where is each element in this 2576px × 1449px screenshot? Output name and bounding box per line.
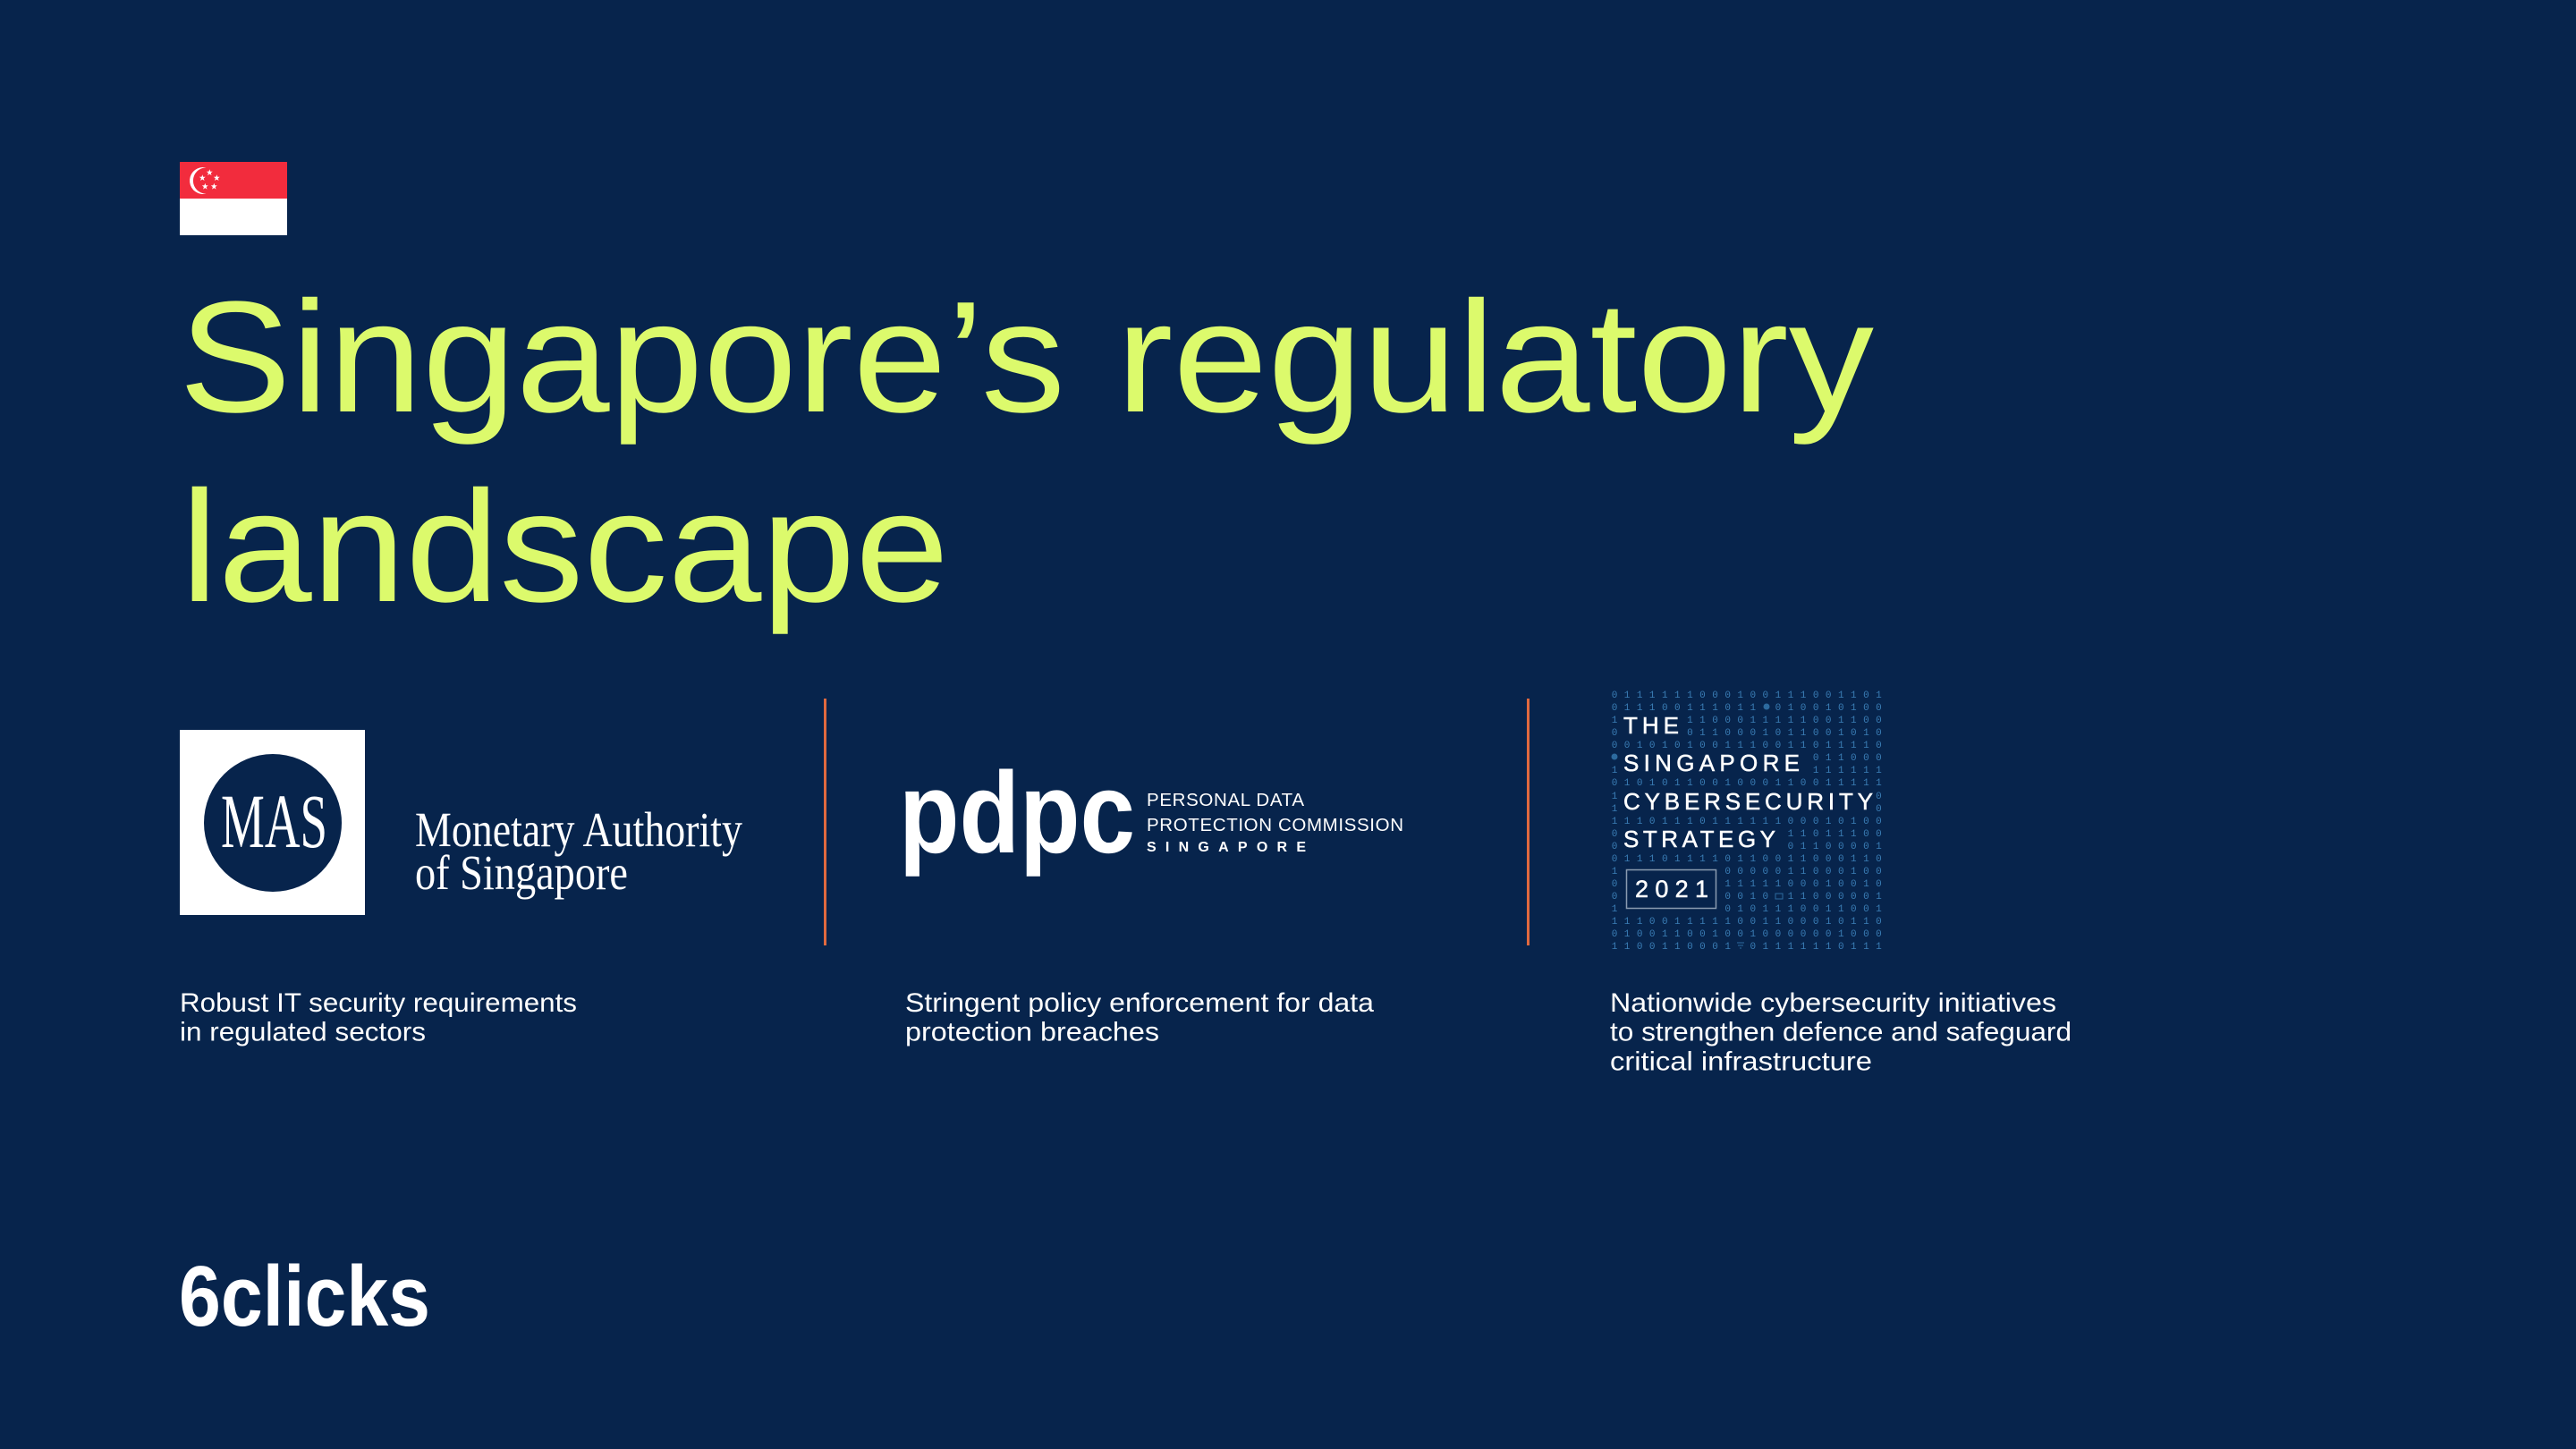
- binary digit background: 1110111011111100010100: [1612, 817, 1888, 827]
- text: PDPC description: protection breaches: [905, 1018, 1159, 1046]
- cover title: SINGAPORE: [1623, 750, 1800, 776]
- title: [179, 268, 1875, 635]
- binary digit background: 0 01100001: [1612, 842, 1888, 852]
- text: PDPC description: Stringent policy enforcement for data: [905, 988, 1374, 1018]
- panel: MAS logo: [180, 730, 742, 915]
- binary digit background: 0010101001110011011110: [1612, 741, 1888, 751]
- cover title: STRATEGY: [1623, 826, 1775, 852]
- text: MAS description: Robust IT security requirements: [180, 988, 577, 1018]
- panel: PDPC logo: PERSONAL DATA: [1147, 790, 1304, 810]
- binary digit background: 0111111000100111001101: [1612, 691, 1888, 701]
- year box: 2021: [1635, 876, 1708, 902]
- title: regulatory: [1116, 268, 1875, 445]
- binary digit background: 1100110001 01111110111: [1612, 942, 1888, 953]
- panel: PDPC logo: pdpc: [899, 749, 1135, 877]
- icon: Singapore flag: [180, 162, 287, 235]
- binary digit background: 0 11011100: [1612, 829, 1888, 840]
- binary digit background: 0101011001000110011111: [1612, 778, 1888, 789]
- title: landscape: [181, 458, 949, 635]
- text: cybersecurity strategy description: to strengthen defence and safeguard: [1610, 1018, 2072, 1046]
- year box: [1626, 869, 1716, 909]
- binary digit background: 0 1111100010010: [1612, 879, 1888, 890]
- text: cybersecurity strategy description: Nationwide cybersecurity initiatives: [1610, 988, 2056, 1018]
- binary digit background: 011000: [1612, 753, 1888, 764]
- binary digit background: 0100110010010000001000: [1612, 929, 1888, 940]
- panel: MAS logo: of Singapore: [415, 845, 628, 900]
- panel: PDPC logo: SINGAPORE: [1147, 840, 1306, 855]
- text: cybersecurity strategy description: [1610, 988, 2072, 1077]
- binary digit background: 1 0: [1612, 804, 1888, 815]
- text: MAS description: in regulated sectors: [180, 1018, 426, 1046]
- text: MAS description: [180, 988, 577, 1046]
- binary digit background: 0 0010 11000001: [1612, 892, 1888, 902]
- binary digit background: 1 1100011111001100: [1612, 716, 1888, 726]
- binary digit background: 1 0: [1612, 792, 1888, 802]
- binary digit background: 011100111011 010010100: [1612, 703, 1888, 714]
- cover title: CYBERSECURITY: [1623, 788, 1873, 815]
- binary digit background: 0111011110110011000110: [1612, 854, 1888, 865]
- panel: MAS logo: Monetary Authority: [415, 802, 742, 857]
- panel: PDPC logo: [899, 749, 1403, 877]
- panel: Singapore Cybersecurity Strategy cover: [1612, 691, 1888, 953]
- text: cybersecurity strategy description: critical infrastructure: [1610, 1046, 1872, 1077]
- binary digit background: 1 0000011000100: [1612, 867, 1888, 877]
- title: Singapore’s: [179, 268, 1065, 445]
- 6clicks logo: 6clicks: [179, 1249, 430, 1344]
- panel: PDPC logo: PROTECTION COMMISSION: [1147, 815, 1403, 835]
- binary digit background: 1110011111001100010110: [1612, 917, 1888, 928]
- cover title: THE: [1623, 712, 1679, 739]
- binary digit background: 1 0101110011001: [1612, 904, 1888, 915]
- binary digit background: [1612, 691, 1888, 953]
- panel: MAS logo: MAS: [221, 778, 327, 864]
- cover title: [1623, 712, 1873, 852]
- binary digit background: 0 0110001011001010: [1612, 728, 1888, 739]
- binary digit background: 1 111111: [1612, 766, 1888, 776]
- text: PDPC description: [905, 988, 1374, 1046]
